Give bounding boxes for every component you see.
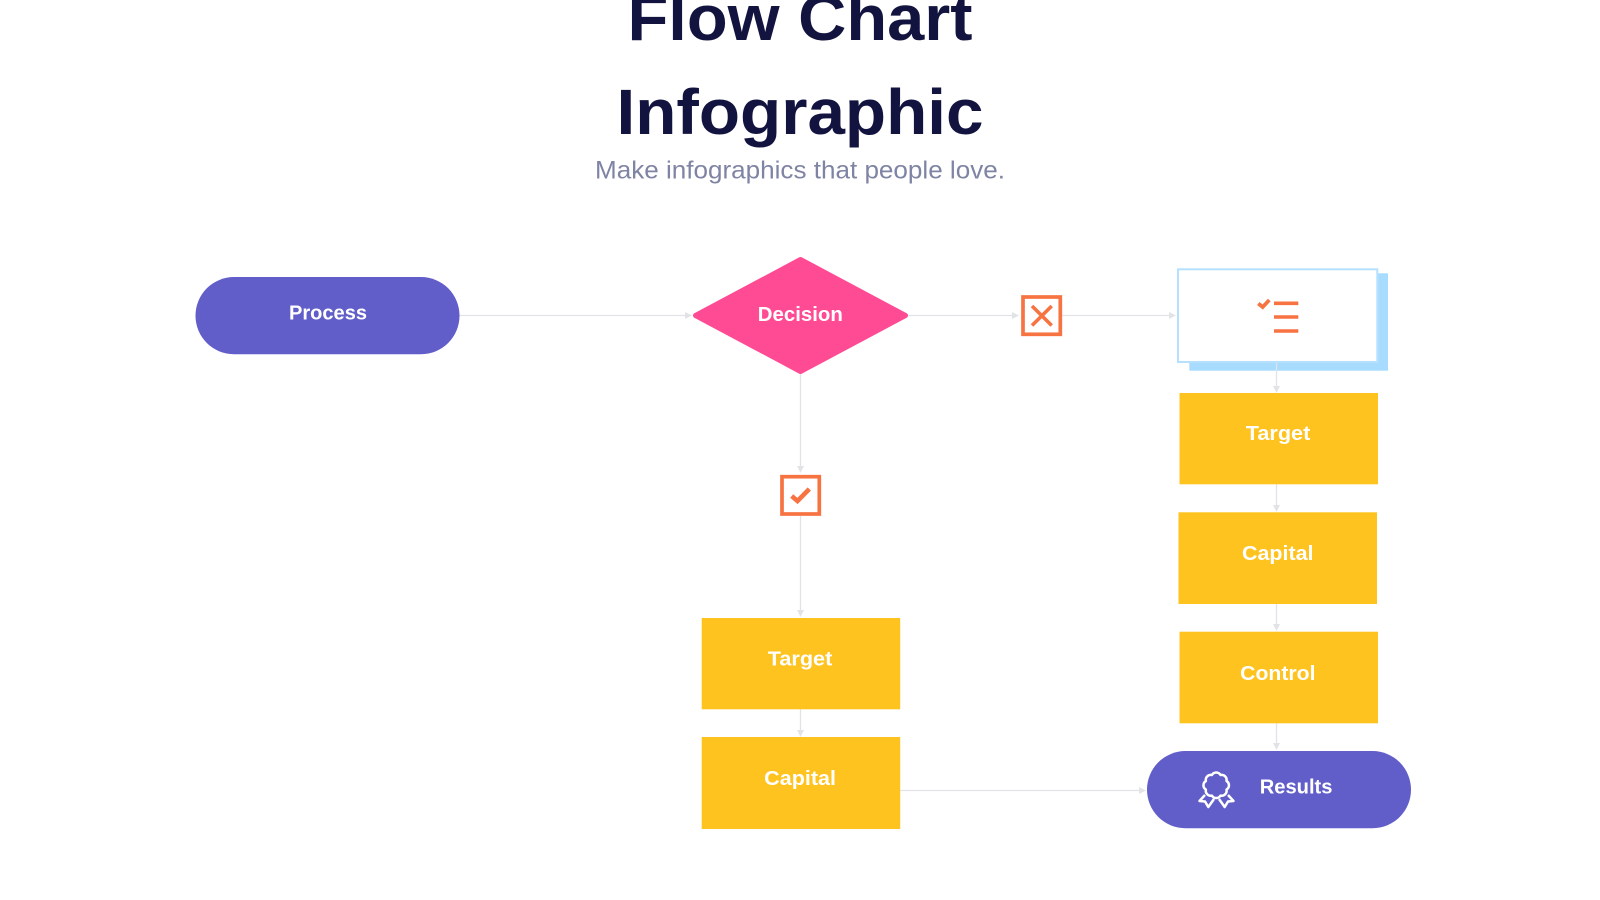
title: Infographic: [616, 76, 984, 148]
arrow: capital to control: [1273, 604, 1280, 631]
card shadow: [1189, 273, 1388, 371]
node: target (center): Target: [768, 648, 832, 671]
icon: checklist: [1258, 300, 1298, 331]
node: target (center): [702, 618, 900, 709]
node: process: [196, 277, 460, 354]
icon: rejected x box: [1023, 297, 1060, 334]
node: control: Control: [1240, 662, 1316, 685]
arrow: decision to rejected: [908, 312, 1019, 319]
subtitle: Make infographics that people love.: [595, 156, 1005, 184]
arrow: capital to results: [899, 787, 1146, 794]
node: results: [1147, 751, 1411, 828]
panel: checklist card: [1178, 269, 1388, 371]
arrow: decision to approved: [797, 374, 804, 473]
node: capital (center): Capital: [764, 767, 836, 790]
arrow: checklist to target: [1273, 363, 1280, 393]
icon: award ribbon: [1200, 773, 1234, 807]
node: target (right): Target: [1246, 422, 1310, 445]
card face: [1178, 269, 1377, 362]
node: capital (center): [702, 737, 900, 829]
arrow: rejected to checklist: [1062, 312, 1176, 319]
arrow: approved to target: [797, 516, 804, 617]
arrow: target to capital right: [1273, 484, 1280, 512]
node: control: [1180, 632, 1378, 723]
arrow: control to results: [1273, 723, 1280, 750]
node: capital (right): [1178, 512, 1377, 604]
node: capital (right): Capital: [1242, 542, 1314, 565]
node: process: Process: [289, 302, 367, 324]
title: [616, 0, 984, 148]
node: decision: Decision: [758, 303, 843, 326]
node: decision: [696, 260, 906, 372]
node: results: Results: [1260, 775, 1332, 798]
node: target (right): [1180, 393, 1378, 484]
arrow: process to decision: [459, 312, 692, 319]
icon: approved check box: [782, 477, 819, 514]
arrow: target to capital: [797, 709, 804, 737]
